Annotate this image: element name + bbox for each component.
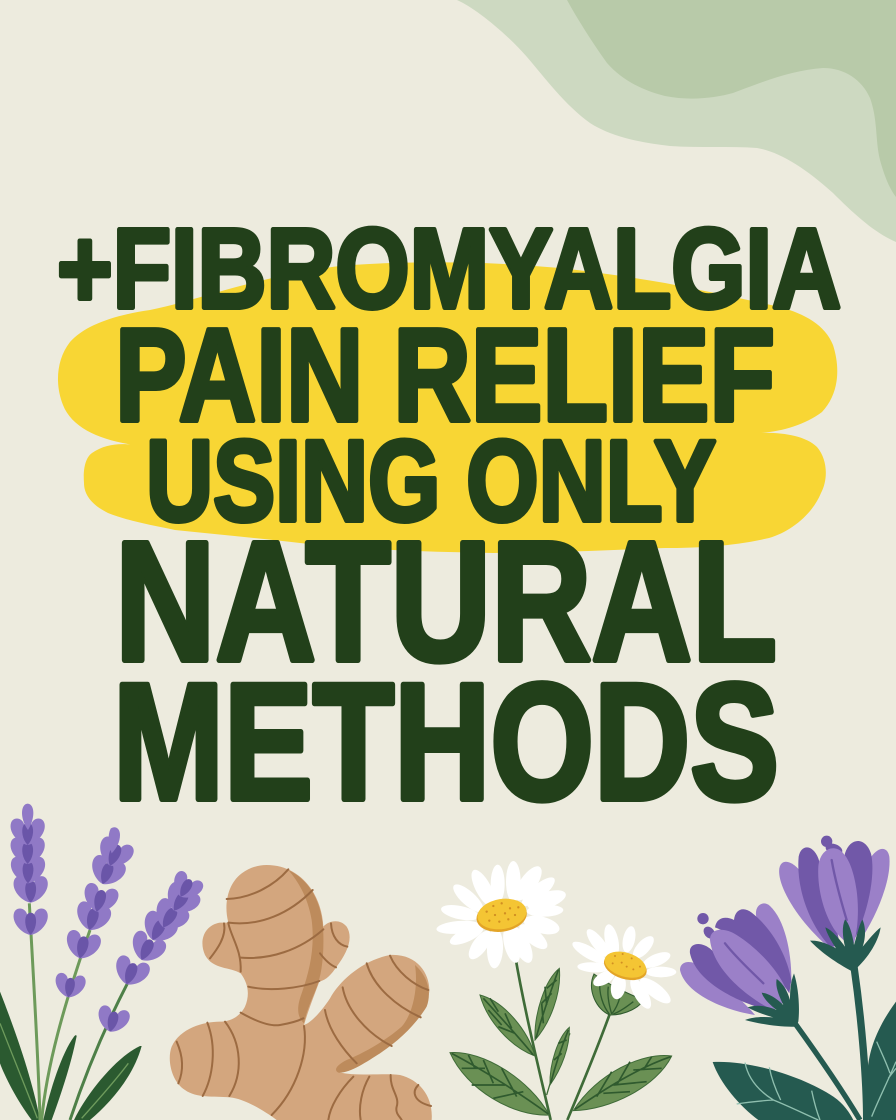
- left flower: [680, 903, 799, 1027]
- ginger shading: [288, 870, 429, 1073]
- daisy leaf veins: [452, 970, 671, 1114]
- lavender leaves: [0, 992, 142, 1120]
- daisy 2 calyx: [592, 974, 643, 1015]
- daisy 2 flower: [570, 923, 676, 1012]
- right flower: [779, 836, 890, 972]
- background wave: light green: [457, 0, 896, 242]
- daisy leaves: [450, 968, 672, 1115]
- daisy stems: [515, 955, 610, 1120]
- botanical: lavender: [0, 804, 205, 1120]
- background wave: darker green: [567, 0, 896, 197]
- title: [57, 206, 841, 835]
- lavender stems: [29, 903, 128, 1120]
- botanical: chamomile daisies: [436, 861, 676, 1120]
- ginger ring lines: [177, 869, 431, 1120]
- teal leaves: [713, 1002, 896, 1120]
- lavender buds: [11, 804, 205, 1035]
- yellow highlight blob: [58, 262, 837, 553]
- daisy 1 flower: [436, 861, 568, 969]
- purple flower stems: [795, 967, 867, 1120]
- botanical: ginger root: [170, 865, 432, 1120]
- ginger body: [170, 865, 432, 1120]
- botanical: purple flowers: [680, 836, 896, 1120]
- title line: using only: USING ONLY: [146, 418, 716, 546]
